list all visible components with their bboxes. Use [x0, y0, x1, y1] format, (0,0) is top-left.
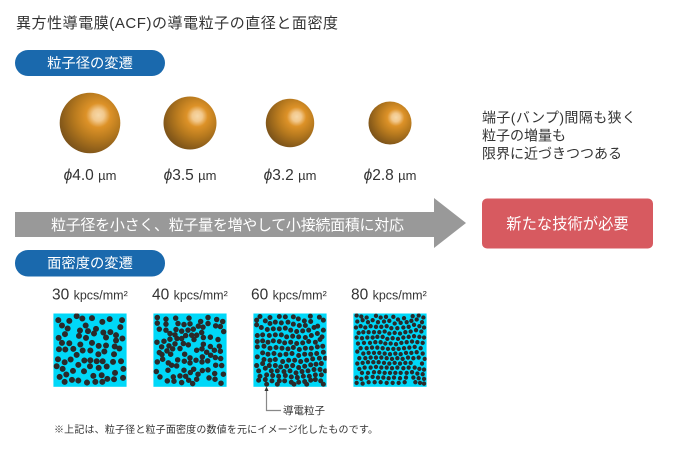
- arrow: smaller diameter, more particles: 粒子径を小さく、粒子量を増やして小接続面積に対応: [51, 217, 404, 234]
- title: 異方性導電膜(ACF)の導電粒子の直径と面密度: [16, 15, 338, 32]
- sphere: 4.0 µm: [60, 93, 120, 184]
- density panel: 60 kpcs/mm2: [253, 314, 327, 387]
- arrow and label: conductive particle: [264, 386, 326, 417]
- label: 40 kpcs/mm2: 40 kpcs/mm²: [152, 286, 228, 304]
- label: 60 kpcs/mm2: 60 kpcs/mm²: [251, 286, 327, 304]
- sphere: 4.0 µm: ϕ4.0 µm: [64, 167, 116, 184]
- sphere: 2.8 µm: ϕ2.8 µm: [364, 167, 416, 184]
- arrow and label: conductive particle: 導電粒子: [283, 404, 326, 417]
- label: 30 kpcs/mm2: 30 kpcs/mm²: [52, 286, 128, 304]
- heading: particle diameter trend: [15, 50, 165, 76]
- footnote: ※上記は、粒子径と粒子面密度の数値を元にイメージ化したものです。: [54, 423, 378, 436]
- text block: limits: 粒子の増量も: [482, 128, 566, 144]
- sphere: 3.2 µm: [264, 99, 316, 184]
- density panel: 30 kpcs/mm2: [53, 314, 127, 387]
- heading: surface density trend: 面密度の変遷: [47, 255, 133, 272]
- density panel: 80 kpcs/mm2: [353, 314, 427, 387]
- sphere: 2.8 µm: [364, 102, 416, 184]
- label: 80 kpcs/mm2: 80 kpcs/mm²: [351, 286, 427, 304]
- text block: limits: 端子(バンプ)間隔も狭く: [482, 110, 636, 126]
- sphere: 3.5 µm: ϕ3.5 µm: [164, 167, 216, 184]
- sphere: 3.2 µm: ϕ3.2 µm: [264, 167, 316, 184]
- text block: limits: [482, 110, 636, 162]
- callout: new technology needed: [482, 198, 653, 248]
- sphere: 3.5 µm: [164, 96, 216, 184]
- arrow: smaller diameter, more particles: [15, 198, 466, 248]
- density panel: 40 kpcs/mm2: [153, 314, 227, 387]
- callout: new technology needed: 新たな技術が必要: [506, 216, 629, 233]
- heading: particle diameter trend: 粒子径の変遷: [47, 55, 133, 72]
- text block: limits: 限界に近づきつつある: [482, 146, 622, 162]
- heading: surface density trend: [15, 250, 165, 276]
